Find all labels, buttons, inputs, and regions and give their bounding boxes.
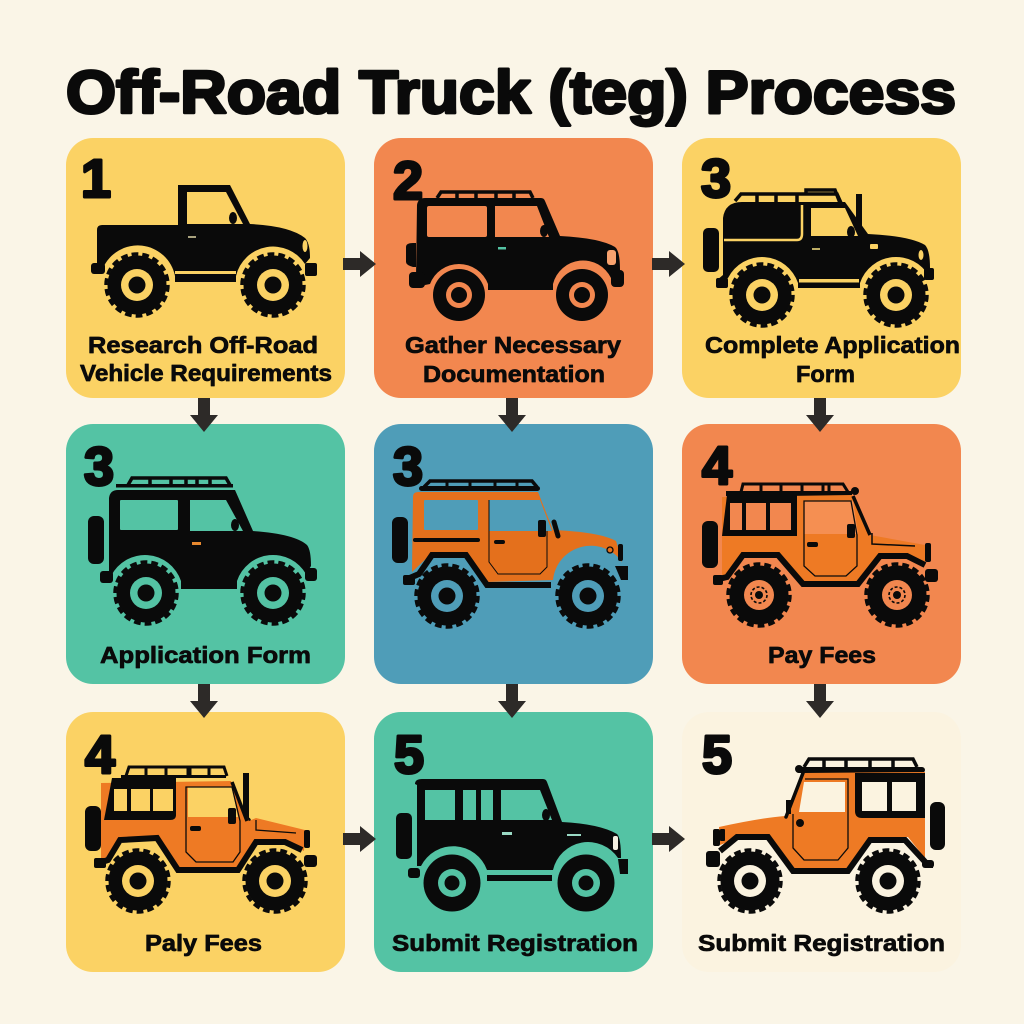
icon: orange truck on yellow <box>85 767 317 912</box>
icon: black wagon with rack <box>88 478 317 624</box>
arrow: 4 down <box>190 684 218 718</box>
panel: step 3 blue <box>374 424 653 684</box>
step number 1: 1 <box>81 149 111 209</box>
arrow: 2 to 3 <box>652 251 685 277</box>
panel: step 5 cream <box>682 712 961 972</box>
title: Off-Road Truck (teg) Process <box>66 59 956 126</box>
icon: black wagon <box>406 192 624 321</box>
step number 3: 3 <box>393 437 423 497</box>
label line 2: Documentation <box>423 361 605 387</box>
icon: orange truck on blue <box>392 481 628 627</box>
arrow: 3 down <box>806 398 834 432</box>
label: Application Form <box>100 642 311 668</box>
icon: orange truck on orange <box>702 484 938 626</box>
arrow: 2 down <box>498 398 526 432</box>
label: Pay Fees <box>768 642 876 668</box>
icon: orange truck facing left <box>706 759 945 912</box>
panel: step 4 paly fees <box>66 712 345 972</box>
label line 2: Form <box>796 361 855 387</box>
panel: step 5 teal <box>374 712 653 972</box>
label: Submit Registration <box>698 930 945 956</box>
label: Research Off-Road <box>88 332 318 358</box>
label: Gather Necessary <box>405 332 621 358</box>
label: Submit Registration <box>392 930 638 956</box>
panel: step 3 complete form <box>682 138 961 398</box>
panel: step 3 application form <box>66 424 345 684</box>
step number 5: 5 <box>394 725 424 785</box>
step number 4: 4 <box>85 725 115 785</box>
step number 3: 3 <box>84 437 114 497</box>
step number 3: 3 <box>701 149 731 209</box>
step number 2: 2 <box>393 151 423 211</box>
panel: step 1 research <box>66 138 345 398</box>
step number 4: 4 <box>702 436 732 496</box>
label: Paly Fees <box>145 930 262 956</box>
icon: black pickup truck <box>91 185 317 316</box>
step number 5: 5 <box>702 725 732 785</box>
icon: black truck with snorkel <box>703 190 934 326</box>
arrow: 8 to 9 <box>652 826 685 852</box>
arrow: 1 down <box>190 398 218 432</box>
arrow: 1 to 2 <box>343 251 376 277</box>
arrow: 6 down <box>806 684 834 718</box>
label line 2: Vehicle Requirements <box>80 360 332 386</box>
panel: step 4 pay fees <box>682 424 961 684</box>
arrow: 5 down <box>498 684 526 718</box>
icon: black truck on teal <box>396 779 628 912</box>
panel: step 2 documentation <box>374 138 653 398</box>
arrow: 7 to 8 <box>343 826 376 852</box>
label: Complete Application <box>705 332 960 358</box>
